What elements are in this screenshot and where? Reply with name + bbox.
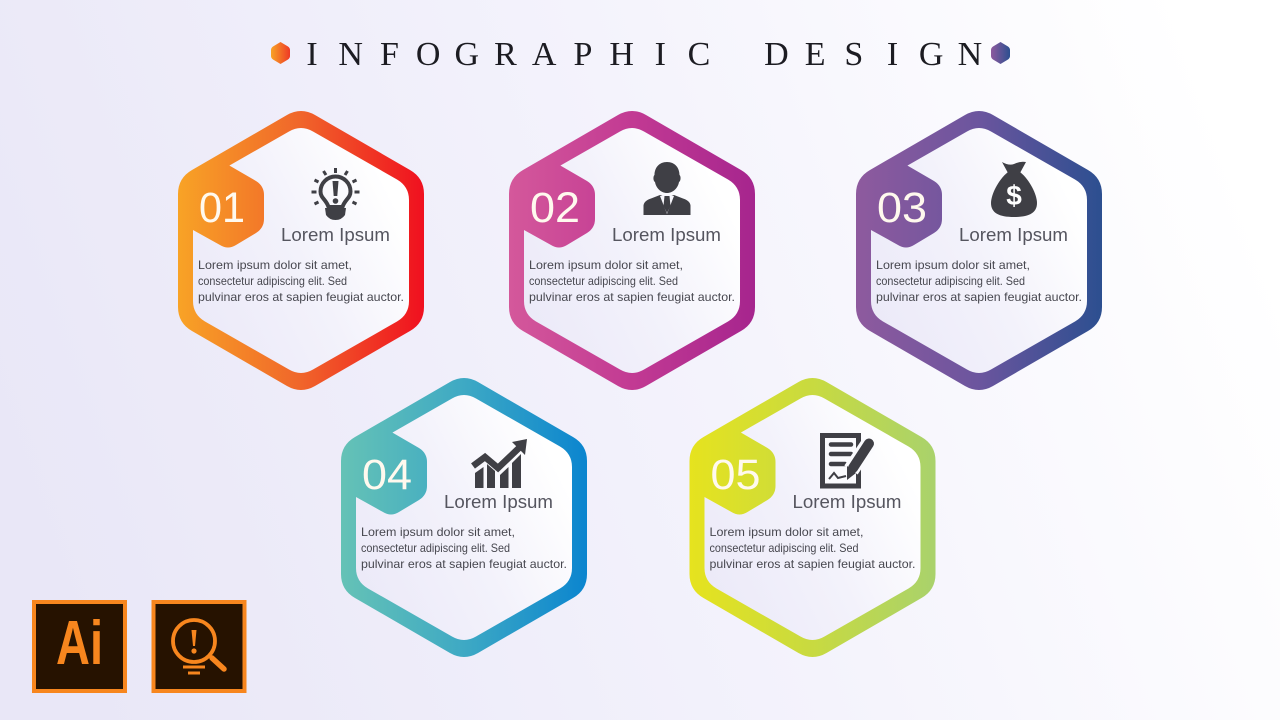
icon: light bulb <box>312 168 360 220</box>
hexagon ring 01 <box>178 111 424 390</box>
panel: 04 <box>341 378 587 657</box>
body text 01: pulvinar eros at sapien feugiat auctor. <box>198 290 404 304</box>
number badge 05 <box>698 430 776 514</box>
heading 01: Lorem Ipsum <box>281 225 390 245</box>
icon: business person <box>644 162 690 215</box>
number badge 03 <box>864 163 942 248</box>
body text 04 <box>361 525 567 571</box>
heading 02: Lorem Ipsum <box>612 225 721 245</box>
icon: rising chart <box>473 439 527 488</box>
number badge 02 <box>517 163 595 248</box>
hexagon interior 01 <box>193 128 409 373</box>
panel: 03 <box>856 111 1102 390</box>
hexagon ring 03 <box>856 111 1102 390</box>
number 01: 01 <box>199 184 245 232</box>
body text 04: pulvinar eros at sapien feugiat auctor. <box>361 557 567 571</box>
body text 02: pulvinar eros at sapien feugiat auctor. <box>529 290 735 304</box>
heading 03: Lorem Ipsum <box>959 225 1068 245</box>
number 05: 05 <box>710 451 760 499</box>
body text 02: Lorem ipsum dolor sit amet, <box>529 258 683 272</box>
logo: Adobe Illustrator <box>34 602 125 691</box>
body text 02: consectetur adipiscing elit. Sed <box>529 274 678 288</box>
hexagon ring 04 <box>341 378 587 657</box>
body text 01: Lorem ipsum dolor sit amet, <box>198 258 352 272</box>
panel: 05 <box>690 378 936 657</box>
body text 03: Lorem ipsum dolor sit amet, <box>876 258 1030 272</box>
icon: money bag <box>991 162 1037 217</box>
icon: document and pen <box>822 436 870 486</box>
logo: search alert icon <box>154 602 244 691</box>
body text 05 <box>710 525 916 571</box>
body text 03 <box>876 258 1082 304</box>
number 02: 02 <box>530 184 580 232</box>
number 04: 04 <box>362 451 412 499</box>
title icon: left hexagon <box>271 42 290 64</box>
panel: 01 <box>178 111 424 390</box>
body text 01: consectetur adipiscing elit. Sed <box>198 274 347 288</box>
body text 04: Lorem ipsum dolor sit amet, <box>361 525 515 539</box>
number 03: 03 <box>877 184 927 232</box>
hexagon interior 02 <box>524 128 740 373</box>
hexagon interior 03 <box>871 128 1087 373</box>
hexagon ring 02 <box>509 111 755 390</box>
hexagon interior 05 <box>704 395 920 640</box>
number badge 01 <box>186 163 264 248</box>
body text 04: consectetur adipiscing elit. Sed <box>361 541 510 555</box>
body text 02 <box>529 258 735 304</box>
body text 01 <box>198 258 404 304</box>
body text 03: consectetur adipiscing elit. Sed <box>876 274 1025 288</box>
title <box>271 36 1010 73</box>
title text: INFOGRAPHIC DESIGN <box>306 36 982 73</box>
heading 04: Lorem Ipsum <box>444 492 553 512</box>
body text 05: Lorem ipsum dolor sit amet, <box>710 525 864 539</box>
title icon: right hexagon <box>991 42 1010 64</box>
body text 05: pulvinar eros at sapien feugiat auctor. <box>710 557 916 571</box>
dollar sign: $ <box>1006 180 1022 211</box>
body text 03: pulvinar eros at sapien feugiat auctor. <box>876 290 1082 304</box>
body text 05: consectetur adipiscing elit. Sed <box>710 541 858 555</box>
logo text Ai: Ai <box>56 609 103 678</box>
hexagon interior 04 <box>356 395 572 640</box>
heading 05: Lorem Ipsum <box>792 492 902 512</box>
panel: 02 <box>509 111 755 390</box>
hexagon ring 05 <box>690 378 936 657</box>
number badge 04 <box>349 430 427 514</box>
